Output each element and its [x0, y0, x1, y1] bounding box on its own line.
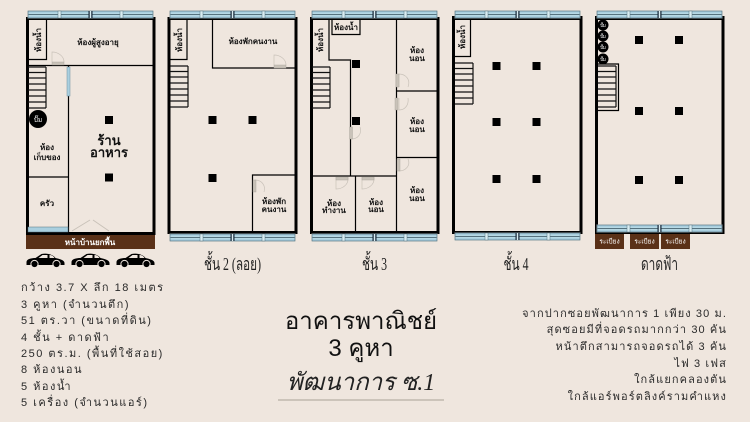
floor plan: floor 3: นอน	[409, 54, 425, 63]
text block: property specifications: 4 ชั้น + ดาดฟ้า	[21, 329, 110, 344]
text block: location highlights: ใกล้แอร์พอร์ตลิงค์รามคำแหง	[568, 390, 727, 403]
floor plan: floor 2: คนงาน	[262, 205, 287, 214]
floor plan: floor 4	[453, 10, 581, 240]
label: floor 2: ชั้น 2 (ลอย)	[204, 251, 261, 275]
floor plan: floor 3: ห้อง	[410, 45, 424, 55]
balconies	[595, 234, 690, 249]
room: elderly room: ห้องผู้สูงอายุ	[77, 37, 119, 48]
text block: property specifications: 5 เครื่อง (จำนวนแอร์)	[21, 394, 149, 409]
text block: location highlights: ไฟ 3 เฟส	[673, 357, 727, 370]
room: bathroom	[28, 19, 46, 60]
floor plan: floor 2: ห้องพักคนงาน	[229, 36, 278, 46]
text block: property specifications	[21, 282, 164, 409]
title	[278, 307, 444, 400]
icons: pumps: ปั๊ม	[600, 56, 606, 62]
floor plan: floor 3: ห้องน้ำ	[334, 21, 358, 32]
label: floor 4: ชั้น 4	[504, 251, 528, 274]
icons: pumps: ปั๊ม	[600, 22, 606, 28]
text block: property specifications: 5 ห้องน้ำ	[21, 378, 72, 393]
icon: cars	[26, 254, 154, 268]
room: storage: ห้อง	[40, 142, 54, 152]
floor plan: floor 3: ห้อง	[410, 116, 424, 126]
room: storage: เก็บของ	[34, 151, 61, 162]
front raised floor bar	[26, 235, 155, 249]
text block: location highlights: ใกล้แยกคลองตัน	[634, 373, 727, 386]
floor plan: floor 3: นอน	[368, 205, 384, 214]
room: bathroom: ห้องน้ำ	[32, 28, 43, 52]
floor plan: floor 4: ห้องน้ำ	[456, 25, 467, 49]
icons: pumps: ปั๊ม	[600, 33, 606, 39]
door: elderly room	[52, 52, 64, 65]
text block: location highlights: สุดซอยมีที่จอดรถมากกว่า 30 คัน	[547, 321, 727, 336]
icon: pump	[29, 110, 47, 128]
text block: location highlights	[522, 307, 727, 403]
room: kitchen: ครัว	[40, 199, 55, 208]
icon: pump: ปั๊ม	[34, 115, 42, 124]
text block: property specifications: กว้าง 3.7 X ลึก 18 เมตร	[21, 282, 164, 294]
balconies: ระเบียง	[634, 238, 655, 246]
text block: property specifications: 3 คูหา (จำนวนตึก)	[21, 299, 130, 311]
floor plan: rooftop	[595, 10, 723, 249]
title: อาคารพาณิชย์	[285, 307, 437, 335]
label: rooftop: ดาดฟ้า	[641, 254, 678, 274]
stairs: ground floor	[28, 67, 46, 108]
floor plan: floor 3: ห้องน้ำ	[314, 28, 325, 52]
label: floor 3: ชั้น 3	[362, 251, 387, 274]
text block: location highlights: หน้าตึกสามารถจอดรถได้ 3 คัน	[556, 340, 727, 353]
floor plan: floor 3: นอน	[409, 194, 425, 203]
title: 3 คูหา	[328, 335, 394, 363]
floor plan: floor 3: ทำงาน	[322, 206, 346, 215]
floor plan: floor 3: ห้อง	[410, 185, 424, 195]
icons: pumps: ปั๊ม	[600, 44, 606, 50]
floor plan: floor 2: ห้องพัก	[262, 196, 286, 206]
floor plan: floor 3: นอน	[409, 125, 425, 134]
text block: property specifications: 51 ตร.วา (ขนาดที่ดิน)	[21, 312, 152, 327]
text block: property specifications: 8 ห้องนอน	[21, 364, 83, 376]
floor plan: floor 3: ห้อง	[369, 197, 383, 207]
floor plan: ground floor	[26, 10, 155, 268]
floor plan: floor 3: ห้อง	[327, 198, 341, 208]
room: restaurant: ร้าน	[97, 133, 121, 148]
title: พัฒนาการ ซ.1	[287, 370, 435, 396]
floor plan: floor 2	[169, 10, 296, 242]
text block: property specifications: 250 ตร.ม. (พื้นที่ใช้สอย)	[21, 345, 164, 360]
text block: location highlights: จากปากซอยพัฒนาการ 1 เพียง 30 ม.	[522, 307, 727, 320]
floor plan: floor 2: ห้องน้ำ	[173, 28, 184, 52]
front raised floor bar: หน้าบ้านยกพื้น	[65, 236, 116, 247]
balconies: ระเบียง	[665, 238, 686, 246]
room: restaurant: อาหาร	[90, 145, 128, 160]
balconies: ระเบียง	[599, 238, 620, 246]
floor plan: floor 3	[311, 10, 438, 242]
icons: pumps	[598, 20, 608, 64]
